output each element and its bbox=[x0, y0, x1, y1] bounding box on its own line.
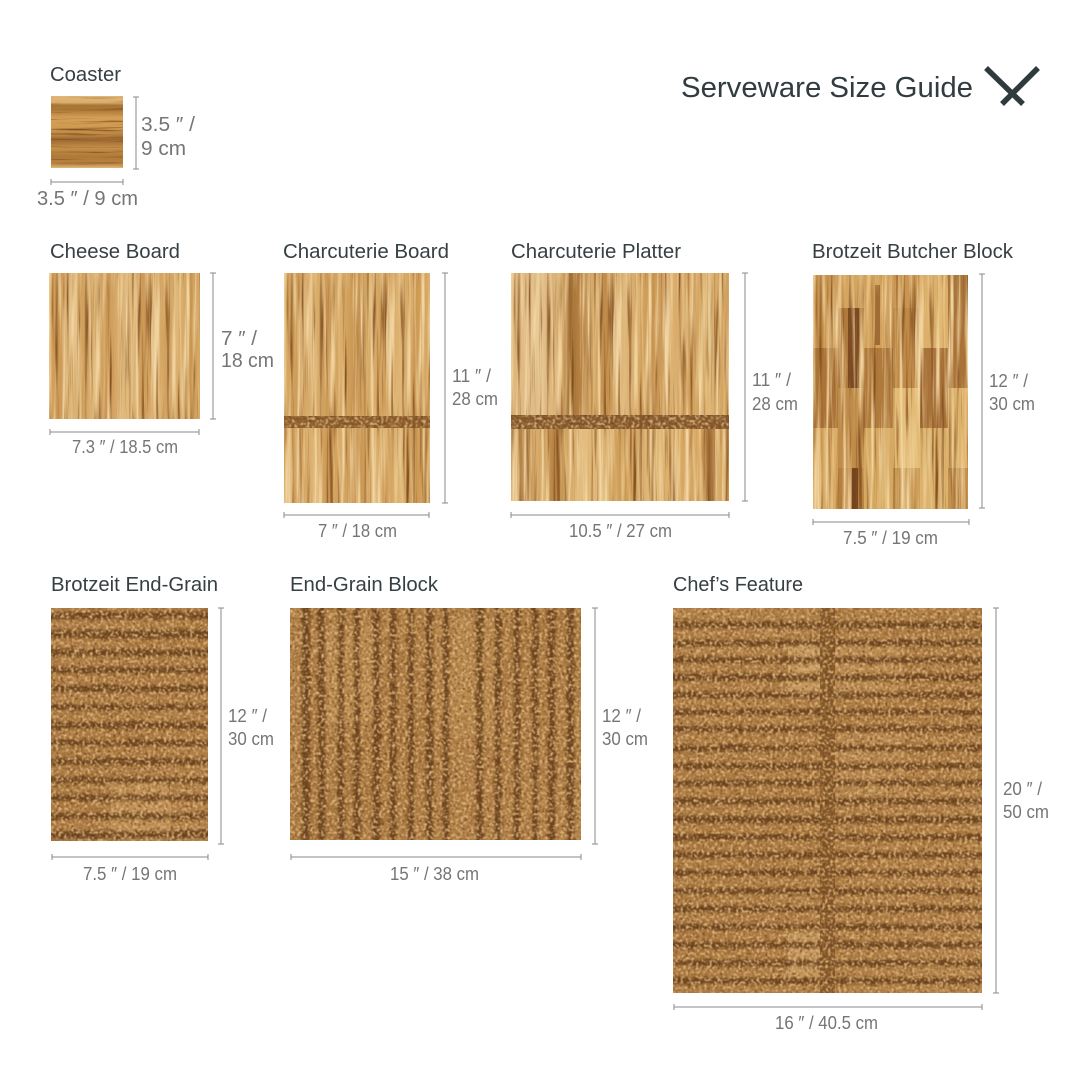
height metric: charcuterie board: 28 cm bbox=[452, 389, 498, 409]
height text: coaster: 3.5 ″ / bbox=[141, 114, 195, 136]
height dimension: charcuterie platter bbox=[742, 273, 748, 501]
heading: coaster: Coaster bbox=[50, 64, 121, 86]
width text: chef's feature: 16 ″ / 40.5 cm bbox=[775, 1013, 878, 1033]
heading: end-grain block: End-Grain Block bbox=[290, 574, 439, 596]
width text: charcuterie board: 7 ″ / 18 cm bbox=[318, 521, 397, 541]
height metric: brotzeit end-grain: 30 cm bbox=[228, 729, 274, 749]
width text: cheese board: 7.3 ″ / 18.5 cm bbox=[72, 437, 178, 457]
width dimension: brotzeit end-grain bbox=[52, 854, 208, 860]
width dimension: cheese board bbox=[50, 429, 199, 435]
height text: chef's feature: 20 ″ / bbox=[1003, 779, 1042, 799]
width text: coaster: 3.5 ″ / 9 cm bbox=[37, 188, 138, 210]
height metric: charcuterie platter: 28 cm bbox=[752, 394, 798, 414]
width dimension: chef's feature bbox=[674, 1004, 982, 1010]
width text: brotzeit end-grain: 7.5 ″ / 19 cm bbox=[83, 864, 177, 884]
height metric: cheese board: 18 cm bbox=[221, 350, 274, 372]
panel: end-grain block bbox=[290, 574, 648, 884]
panel: coaster bbox=[37, 64, 195, 210]
width dimension: charcuterie platter bbox=[511, 512, 729, 518]
height dimension: charcuterie board bbox=[442, 273, 448, 503]
height dimension: chef's feature bbox=[993, 608, 999, 993]
board: end-grain block bbox=[290, 608, 581, 840]
height dimension: cheese board bbox=[210, 273, 216, 419]
board: charcuterie board bbox=[284, 273, 430, 503]
width dimension: brotzeit butcher block bbox=[813, 519, 969, 525]
height text: charcuterie board: 11 ″ / bbox=[452, 366, 491, 386]
height text: brotzeit butcher block: 12 ″ / bbox=[989, 371, 1028, 391]
height dimension: end-grain block bbox=[592, 608, 598, 844]
height text: charcuterie platter: 11 ″ / bbox=[752, 370, 791, 390]
heading: brotzeit end-grain: Brotzeit End-Grain bbox=[51, 574, 218, 596]
height metric: chef's feature: 50 cm bbox=[1003, 802, 1049, 822]
board: chef's feature bbox=[673, 608, 982, 993]
heading: brotzeit butcher block: Brotzeit Butcher Block bbox=[812, 241, 1014, 263]
width text: brotzeit butcher block: 7.5 ″ / 19 cm bbox=[843, 528, 938, 548]
board: charcuterie platter bbox=[511, 273, 729, 501]
width text: charcuterie platter: 10.5 ″ / 27 cm bbox=[569, 521, 672, 541]
board: cheese board bbox=[49, 273, 200, 419]
title: Serveware Size Guide bbox=[681, 72, 973, 104]
panel: brotzeit end-grain bbox=[43, 574, 274, 884]
board: brotzeit end-grain bbox=[51, 608, 208, 841]
board: brotzeit butcher block bbox=[813, 275, 968, 509]
width text: end-grain block: 15 ″ / 38 cm bbox=[390, 864, 479, 884]
panel: charcuterie board bbox=[283, 241, 498, 541]
width dimension: coaster bbox=[51, 179, 123, 185]
width dimension: charcuterie board bbox=[284, 512, 429, 518]
board: coaster bbox=[51, 96, 123, 168]
width dimension: end-grain block bbox=[291, 854, 581, 860]
height metric: brotzeit butcher block: 30 cm bbox=[989, 394, 1035, 414]
icon: crossed knives bbox=[986, 68, 1038, 104]
height dimension: brotzeit end-grain bbox=[218, 608, 224, 844]
panel: brotzeit butcher block bbox=[812, 241, 1035, 548]
panel: charcuterie platter bbox=[511, 241, 798, 541]
panel: chef's feature bbox=[665, 574, 1049, 1033]
heading: chef's feature: Chef’s Feature bbox=[673, 574, 803, 596]
height dimension: coaster bbox=[133, 97, 139, 169]
panel: cheese board bbox=[49, 241, 274, 457]
heading: charcuterie board: Charcuterie Board bbox=[283, 241, 449, 263]
height text: end-grain block: 12 ″ / bbox=[602, 706, 641, 726]
height metric: end-grain block: 30 cm bbox=[602, 729, 648, 749]
height text: brotzeit end-grain: 12 ″ / bbox=[228, 706, 267, 726]
height text: cheese board: 7 ″ / bbox=[221, 328, 257, 350]
height metric: coaster: 9 cm bbox=[141, 138, 186, 160]
heading: charcuterie platter: Charcuterie Platter bbox=[511, 241, 681, 263]
heading: cheese board: Cheese Board bbox=[50, 241, 180, 263]
height dimension: brotzeit butcher block bbox=[979, 274, 985, 508]
